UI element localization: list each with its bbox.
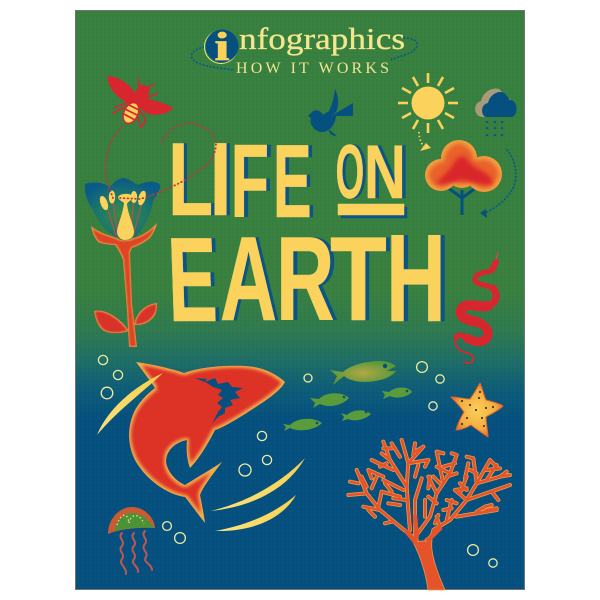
raindrops <box>486 121 503 136</box>
title letters: E <box>166 214 219 347</box>
coral branches outline <box>348 440 510 540</box>
logo subtitle: HOW IT WORKS <box>236 60 389 77</box>
title shadow <box>169 121 450 348</box>
coral trunk <box>413 540 445 590</box>
title shadow: F <box>234 124 273 240</box>
icon: flower <box>85 178 160 347</box>
title letters: O <box>336 129 364 215</box>
icon: sun <box>398 73 458 133</box>
title letters: A <box>220 211 277 346</box>
flower right leaf <box>134 303 157 325</box>
icon: bee <box>108 76 173 128</box>
icon: coral <box>348 440 510 590</box>
title letters <box>166 121 446 348</box>
logo i badge <box>204 25 238 69</box>
cloud shadow <box>475 89 512 117</box>
title letters: F <box>231 124 269 240</box>
tree canopy <box>425 140 502 192</box>
cloud <box>482 92 517 117</box>
title letters: T <box>330 212 387 346</box>
cover background <box>75 10 525 590</box>
series logo <box>191 21 417 77</box>
logo wordmark: nfographics <box>239 21 405 56</box>
title shadow: E <box>169 214 223 347</box>
title: Life on Earth <box>166 121 450 348</box>
fish school <box>283 361 412 431</box>
logo i badge: i <box>214 25 230 69</box>
title letters: H <box>386 209 446 348</box>
flower anthers <box>98 190 147 211</box>
jellyfish tentacles <box>120 531 152 574</box>
icon: jellyfish <box>108 507 155 574</box>
tree canopy core <box>436 156 493 185</box>
title shadow: T <box>334 212 391 346</box>
shark mouth <box>195 378 243 424</box>
icon: starfish <box>451 383 503 437</box>
title shadow: I <box>213 121 235 237</box>
title letters: I <box>210 121 232 237</box>
title shadow: O <box>338 129 367 215</box>
title shadow: L <box>171 122 216 238</box>
title letters: L <box>168 122 213 238</box>
arrow: cloud cycle to tree <box>480 150 516 218</box>
arrow: sun to tree <box>419 132 431 151</box>
flower stamens <box>108 198 142 236</box>
speed lines <box>97 373 305 531</box>
jellyfish bell <box>108 507 155 534</box>
small fish <box>283 388 412 431</box>
coral branches fill <box>348 440 510 542</box>
tree canopy mid <box>425 140 502 192</box>
icon: bee flight trail <box>106 123 216 199</box>
icon: snake <box>455 253 498 363</box>
logo dotted swoosh <box>191 38 417 70</box>
icon: rain cloud <box>475 89 517 136</box>
title shadow: A <box>223 211 280 346</box>
flower pistil <box>117 194 134 240</box>
bubbles <box>98 355 497 567</box>
tree trunk <box>447 187 477 215</box>
title shadow: E <box>276 123 315 239</box>
icon: tree <box>425 140 502 215</box>
icon: shark <box>129 362 285 523</box>
icon: bird <box>308 89 353 136</box>
title letters: N <box>364 131 406 215</box>
title letters: E <box>273 123 312 239</box>
flower petals <box>85 178 160 237</box>
title letters: R <box>276 211 334 346</box>
flower left leaf <box>94 311 129 333</box>
title shadow: R <box>280 211 339 346</box>
large fish <box>330 361 396 385</box>
flower stem and sepals <box>91 223 157 347</box>
title shadow: H <box>390 209 450 348</box>
title shadow: N <box>367 131 409 215</box>
